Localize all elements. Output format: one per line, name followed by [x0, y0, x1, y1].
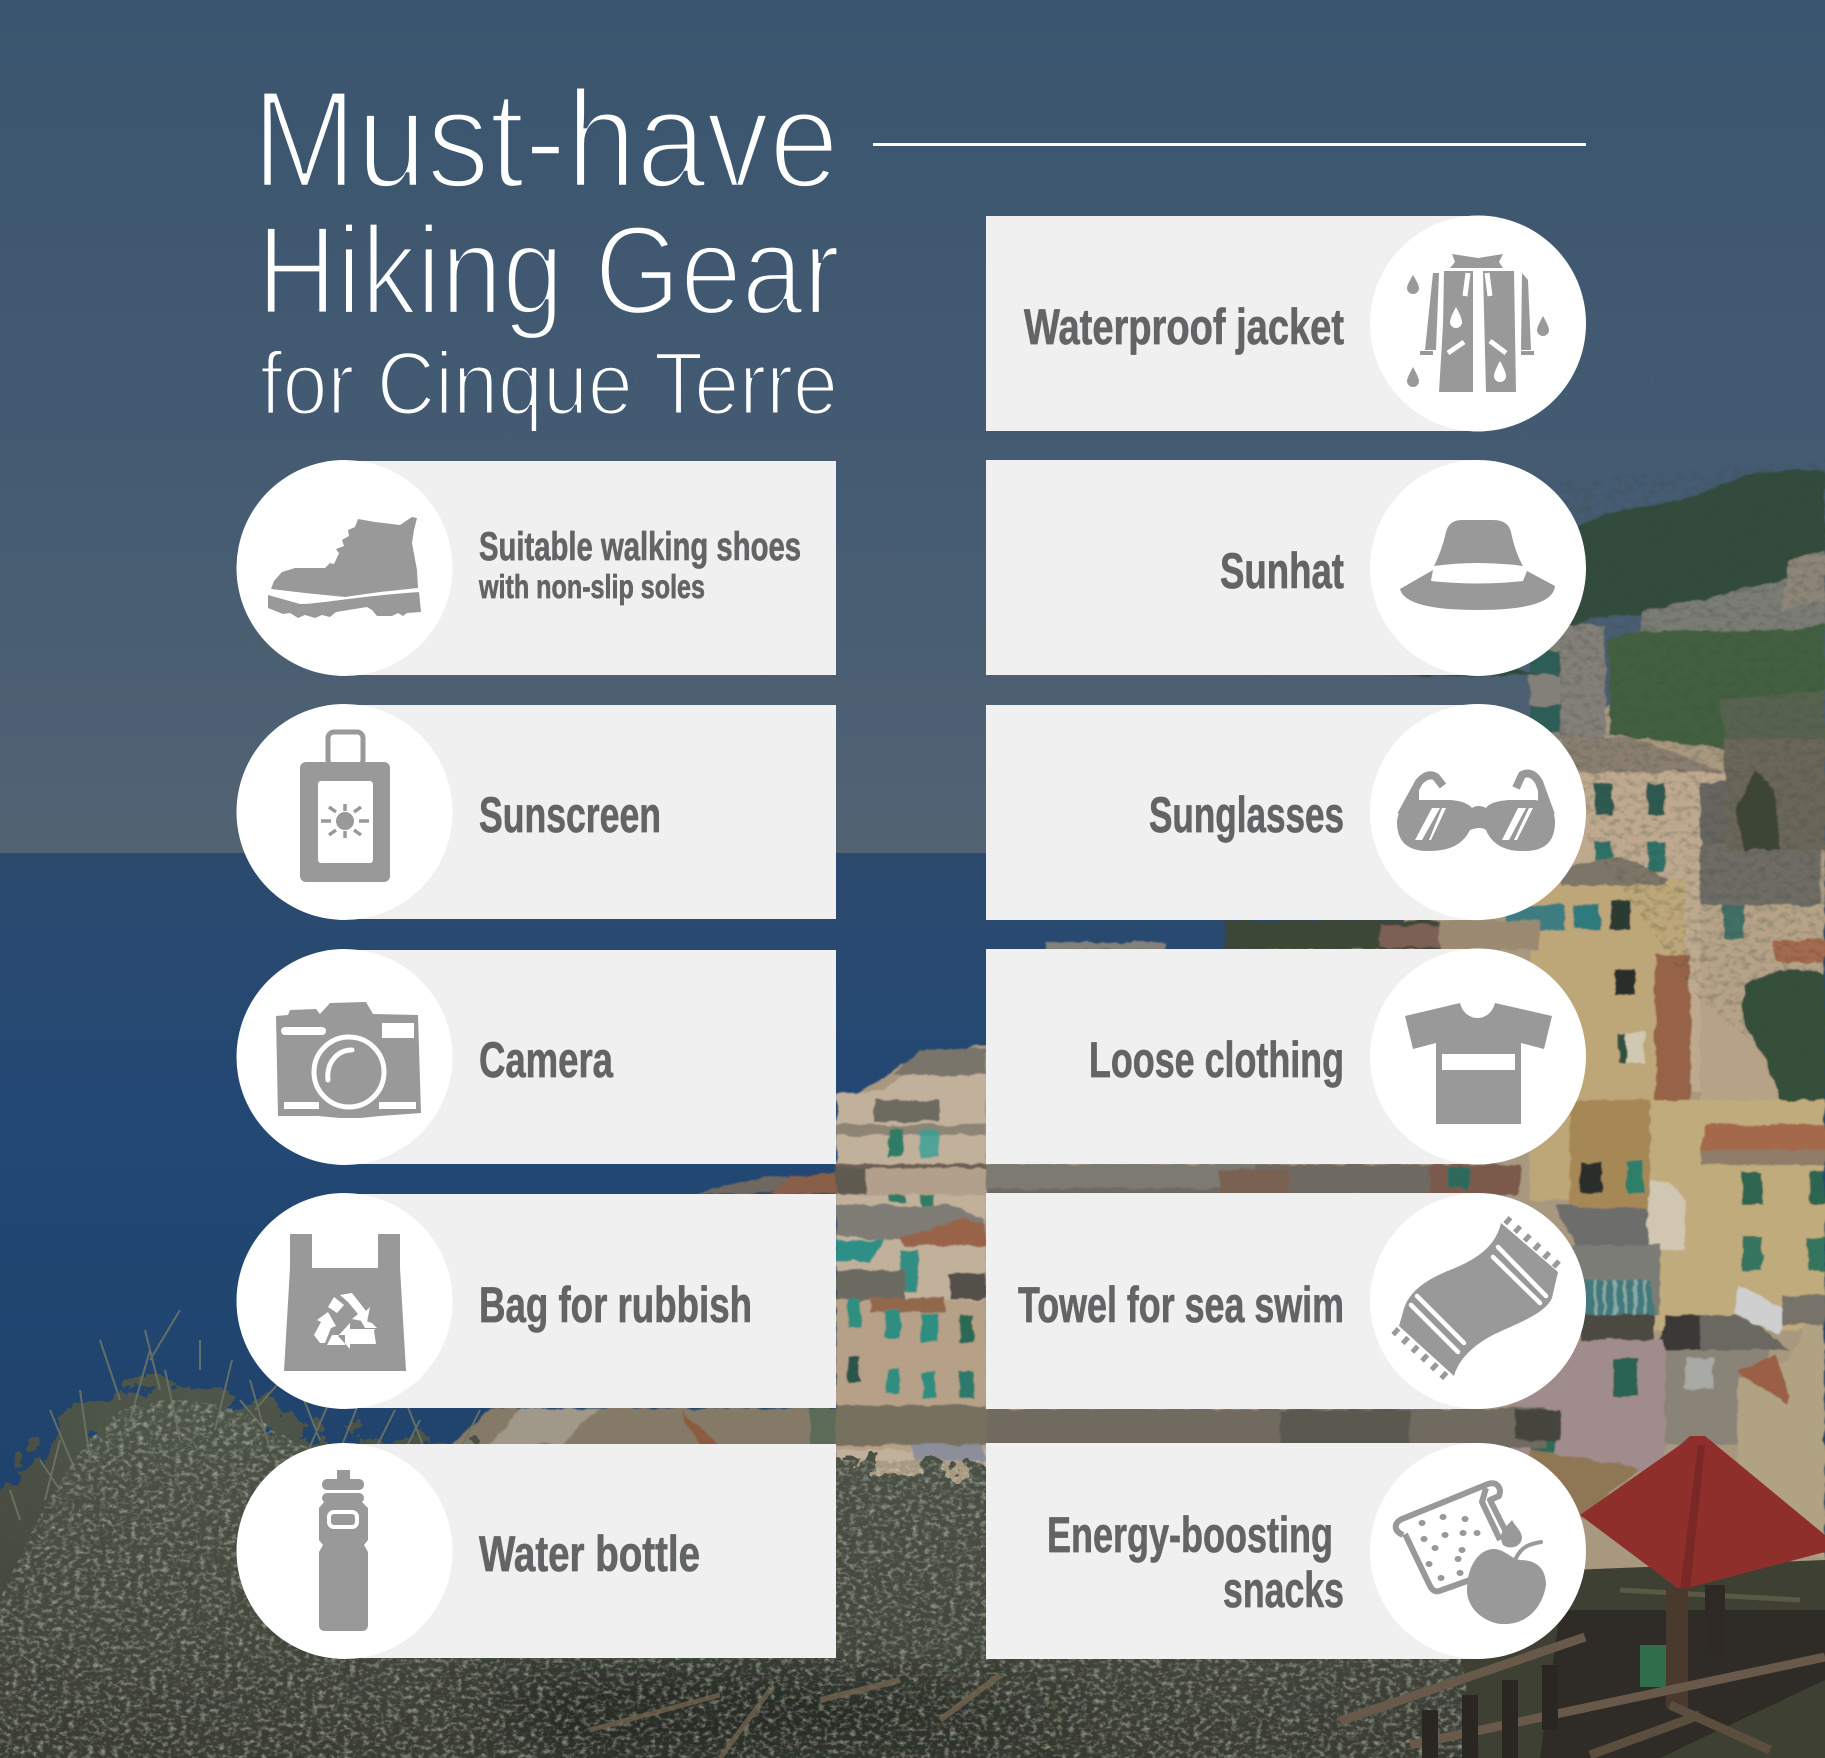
cream wall right [1738, 1290, 1825, 1560]
panel: walking shoes [236, 460, 836, 676]
label: sunhat: Sunhat [1220, 543, 1344, 599]
icon: raincoat [1407, 254, 1549, 392]
label: energy-boosting snacks [1047, 1507, 1344, 1618]
title [252, 62, 840, 433]
pine canopy top right [1560, 470, 1825, 640]
panel: energy snacks [986, 1443, 1586, 1659]
branches over sea [10, 1310, 480, 1520]
panel: sunscreen [236, 704, 836, 920]
yellow building [1650, 1100, 1825, 1330]
panel: towel [986, 1193, 1586, 1409]
label: walking shoes: with non-slip soles [478, 568, 705, 605]
label: walking shoes: Suitable walking shoes [479, 525, 801, 569]
label: towel for sea swim: Towel for sea swim [1018, 1277, 1344, 1333]
roof near sea, row 3-4 gap at left [770, 1175, 836, 1195]
panel: rubbish bag [236, 1193, 836, 1409]
pink house [1510, 1340, 1665, 1470]
icon: towel [1394, 1219, 1563, 1381]
label: sunscreen: Sunscreen [479, 787, 661, 843]
icon: bag with recycle symbol [284, 1234, 406, 1371]
icon: sunglasses [1397, 774, 1555, 851]
foliage and roofs between row 3 and 4 [1225, 920, 1525, 950]
foliage [0, 1385, 1600, 1758]
title line 1: Must-have [252, 62, 839, 217]
main tan house [1560, 770, 1725, 1090]
panel: sunglasses [986, 704, 1586, 920]
title line 3: for Cinque Terre [260, 333, 838, 433]
label: walking shoes [478, 525, 801, 605]
label: water bottle: Water bottle [479, 1526, 700, 1582]
ochre house [1530, 880, 1685, 1200]
icon: t-shirt [1405, 1003, 1552, 1124]
icon: camera [276, 1002, 421, 1118]
tan roof [1530, 1450, 1640, 1520]
title rule [873, 143, 1586, 146]
label: energy-boosting snacks: snacks [1223, 1562, 1344, 1618]
umbrella and bottom right garden [1430, 1498, 1825, 1758]
dark roof block [1660, 1315, 1790, 1350]
icon: water bottle [319, 1470, 368, 1631]
central village block [836, 1048, 986, 1460]
icon: sunhat [1400, 520, 1555, 610]
label: camera: Camera [479, 1032, 614, 1088]
panel: sunhat [986, 460, 1586, 676]
label: energy-boosting snacks: Energy-boosting [1047, 1507, 1333, 1563]
label: sunglasses: Sunglasses [1149, 787, 1344, 843]
gap row 4-5 left village [445, 1408, 836, 1450]
label: bag for rubbish: Bag for rubbish [479, 1277, 752, 1333]
lower row strip [986, 1164, 1506, 1196]
village base [836, 600, 1825, 1758]
title line 2: Hiking Gear [257, 200, 840, 341]
church tower and roofs [1648, 1180, 1685, 1250]
dark photo grain over right hillside [1560, 460, 1825, 1100]
label: loose clothing: Loose clothing [1089, 1032, 1344, 1088]
label: waterproof jacket: Waterproof jacket [1024, 299, 1344, 355]
striped awning [1584, 1280, 1656, 1315]
icon: boot [268, 517, 421, 618]
panel: loose clothing [986, 948, 1586, 1164]
icon: sunscreen bottle [300, 732, 390, 882]
panel: camera [236, 949, 836, 1165]
panel: water bottle [236, 1443, 836, 1659]
right green tree [1742, 970, 1825, 1105]
panel: waterproof jacket [986, 216, 1586, 432]
icon: bread and apple [1396, 1483, 1546, 1624]
mid hill houses [1530, 625, 1605, 740]
